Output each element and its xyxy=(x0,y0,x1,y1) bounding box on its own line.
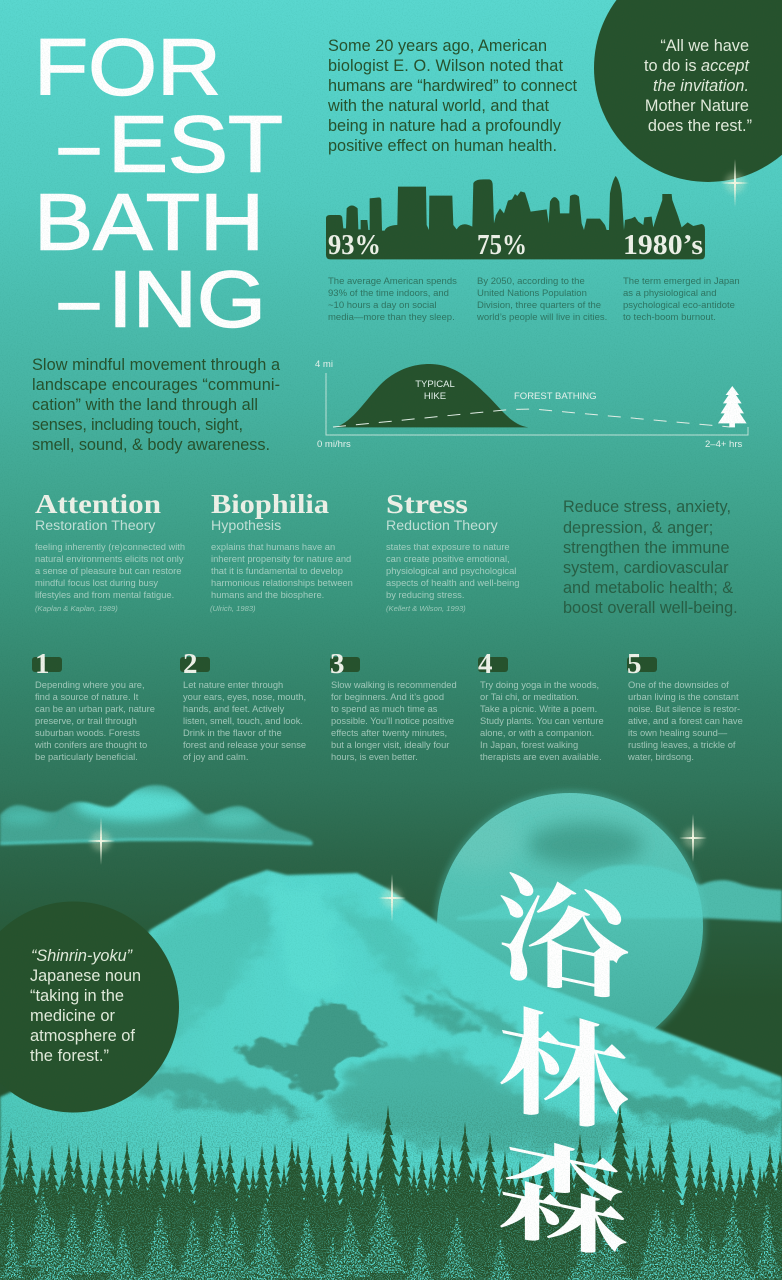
cloud: right xyxy=(457,865,782,922)
step 1: with conifers are thought to xyxy=(34,740,147,750)
description paragraph: smell, sound, & body awareness. xyxy=(32,436,270,454)
definition circle xyxy=(0,902,179,1112)
step 5 xyxy=(627,648,743,762)
forest bathing label: FOREST BATHING xyxy=(514,391,597,402)
definition text xyxy=(30,947,141,1065)
step 3: possible. You’ll notice positive xyxy=(331,716,454,726)
step 1: can be an urban park, nature xyxy=(35,704,155,714)
stat caption: 75%: Division, three quarters of the xyxy=(477,300,601,311)
stat caption: 75% xyxy=(476,276,607,323)
theory: attention restoration: feeling inherently (re)connected with xyxy=(35,542,185,552)
theory: stress reduction: (Kellert & Wilson, 1993) xyxy=(386,604,466,613)
moon xyxy=(434,790,706,1062)
y axis max label: 4 mi xyxy=(315,359,333,370)
axes xyxy=(326,373,748,435)
quote text xyxy=(644,37,752,135)
step 1: be particularly beneficial. xyxy=(35,752,138,762)
scene: moon, clouds, mountain, forest xyxy=(0,780,782,1280)
calligraphy: shinrin-yoku kanji: 林 xyxy=(497,996,629,1152)
title: Forest Bathing: BATH xyxy=(34,178,264,266)
step 4 number badge: 4 xyxy=(478,648,492,680)
theory: biophilia hypothesis: explains that humans have an xyxy=(211,542,335,552)
step 2: of joy and calm. xyxy=(183,752,248,762)
theory: stress reduction: by reducing stress. xyxy=(386,590,464,600)
step 2 number badge: 2 xyxy=(183,648,198,680)
step 1: find a source of nature. It xyxy=(35,692,139,702)
theory: stress reduction: can create positive emotional, xyxy=(386,554,510,564)
statistic: 93%: 93% xyxy=(328,230,381,261)
step 2: forest and release your sense xyxy=(183,740,306,750)
step 3: hours, is even better. xyxy=(331,752,418,762)
theory: stress reduction xyxy=(386,489,520,613)
theory: attention restoration xyxy=(35,489,185,613)
theory: biophilia hypothesis: humans and the biosphere. xyxy=(211,590,324,600)
description paragraph: landscape encourages “communi- xyxy=(32,376,280,394)
stat caption: 75%: United Nations Population xyxy=(477,288,587,299)
step 2: your ears, eyes, nose, mouth, xyxy=(183,692,306,702)
theory: stress reduction: Reduction Theory xyxy=(386,518,499,534)
benefits text: strengthen the immune xyxy=(563,539,730,557)
chart: typical hike vs forest bathing xyxy=(315,359,748,450)
title: Forest Bathing: – xyxy=(59,254,99,344)
quote text: the invitation. xyxy=(653,77,749,95)
step 2: hands, and feet. Actively xyxy=(183,704,285,714)
step 4: Study plants. You can venture xyxy=(480,716,604,726)
step 5 number badge: 5 xyxy=(627,648,642,680)
title: Forest Bathing: – xyxy=(59,100,99,188)
step 5: rustling leaves, a trickle of xyxy=(628,740,736,750)
statistic: 75%: 75% xyxy=(477,230,527,261)
stat caption: 1980's: The term emerged in Japan xyxy=(623,276,740,287)
calligraphy: shinrin-yoku kanji xyxy=(497,864,634,1276)
intro paragraph: biologist E. O. Wilson noted that xyxy=(328,57,563,75)
step 3: but a longer visit, ideally four xyxy=(331,740,449,750)
icon: sparkle on moon xyxy=(679,814,707,862)
title: Forest Bathing: EST xyxy=(108,100,283,188)
benefits text: Reduce stress, anxiety, xyxy=(563,498,731,516)
quote text: to do is accept xyxy=(644,57,750,75)
step 2: listen, smell, touch, and look. xyxy=(183,716,303,726)
description paragraph: cation” with the land through all xyxy=(32,396,258,414)
intro paragraph: with the natural world, and that xyxy=(327,97,549,115)
definition text: “taking in the xyxy=(30,987,124,1005)
title: Forest Bathing xyxy=(34,22,283,344)
stat caption: 93%: media—more than they sleep. xyxy=(328,312,455,323)
calligraphy: shinrin-yoku kanji: 森 xyxy=(497,1126,629,1276)
step 2: Let nature enter through xyxy=(183,680,283,690)
step 5: One of the downsides of xyxy=(628,680,729,690)
theory: stress reduction: aspects of health and well-being xyxy=(386,578,520,588)
description paragraph: Slow mindful movement through a xyxy=(32,356,281,374)
intro paragraph: being in nature had a profoundly xyxy=(328,117,562,135)
icon: sparkle by mountain xyxy=(378,874,406,922)
typical hike label: TYPICAL xyxy=(415,379,455,390)
stat caption: 93%: The average American spends xyxy=(328,276,457,287)
quote text: “All we have xyxy=(660,37,749,55)
definition text: “Shinrin-yoku” xyxy=(31,947,134,965)
stat caption: 1980's: as a physiological and xyxy=(623,288,716,299)
step 4: or Tai chi, or meditation. xyxy=(480,692,579,702)
step 4: therapists are even available. xyxy=(480,752,602,762)
theory: biophilia hypothesis: (Ulrich, 1983) xyxy=(210,604,256,613)
benefits text: system, cardiovascular xyxy=(563,559,729,577)
sunlit foreground trees xyxy=(0,1183,781,1280)
theory: attention restoration: Attention xyxy=(35,489,161,519)
forest bathing dashed line xyxy=(333,409,730,427)
title: Forest Bathing: ING xyxy=(108,254,266,344)
theory: attention restoration: a sense of pleasure but can restore xyxy=(35,566,181,576)
step 3: to spend as much time as xyxy=(331,704,438,714)
theory: biophilia hypothesis: that it is fundamental to develop xyxy=(211,566,343,576)
theory: biophilia hypothesis: Biophilia xyxy=(211,489,330,519)
statistic: 1980's: 1980’s xyxy=(623,230,703,261)
step 5: its own healing sound— xyxy=(628,728,728,738)
city skyline silhouette xyxy=(326,176,705,259)
step 5: ative, and a forest can have xyxy=(628,716,743,726)
intro paragraph: Some 20 years ago, American xyxy=(328,37,547,55)
hike curve xyxy=(335,364,528,427)
step 3: Slow walking is recommended xyxy=(331,680,457,690)
theory: stress reduction: states that exposure to nature xyxy=(386,542,510,552)
step 2 xyxy=(180,648,306,762)
x axis origin label: 0 mi/hrs xyxy=(317,439,351,450)
definition text: atmosphere of xyxy=(30,1027,135,1045)
theory: stress reduction: physiological and psychological xyxy=(386,566,516,576)
benefits text xyxy=(563,498,738,617)
benefits text: depression, & anger; xyxy=(563,519,713,537)
step 1: Depending where you are, xyxy=(35,680,145,690)
step 4: In Japan, forest walking xyxy=(480,740,578,750)
description paragraph xyxy=(32,356,281,454)
step 5: water, birdsong. xyxy=(627,752,694,762)
x axis end label: 2–4+ hrs xyxy=(705,439,742,450)
stat caption: 93%: 93% of the time indoors, and xyxy=(328,288,449,299)
quote text: does the rest.” xyxy=(648,117,752,135)
calligraphy: shinrin-yoku kanji: 浴 xyxy=(497,864,634,1021)
definition text: the forest.” xyxy=(30,1047,109,1065)
stat caption: 1980's xyxy=(623,276,740,323)
step 4: alone, or with a companion. xyxy=(480,728,594,738)
mountain xyxy=(0,868,782,1205)
step 3: effects after twenty minutes, xyxy=(331,728,447,738)
title: Forest Bathing: FOR xyxy=(34,22,221,112)
stat caption: 75%: world’s people will live in cities. xyxy=(476,312,607,323)
step 5: urban living is the constant xyxy=(628,692,739,702)
skyline with statistics xyxy=(326,176,705,261)
step 1: suburban woods. Forests xyxy=(35,728,140,738)
intro paragraph xyxy=(327,37,577,155)
definition text: medicine or xyxy=(30,1007,116,1025)
theory: stress reduction: Stress xyxy=(386,489,468,519)
theory: biophilia hypothesis xyxy=(210,489,353,613)
stat caption: 1980's: to tech-boom burnout. xyxy=(623,312,716,323)
forest xyxy=(0,1103,782,1280)
theory: attention restoration: lifestyles and from mental fatigue. xyxy=(35,590,174,600)
typical hike label line 2: HIKE xyxy=(424,391,446,402)
step 1: preserve, or trail through xyxy=(35,716,137,726)
stat caption: 93% xyxy=(328,276,457,323)
step 3: for beginners. And it’s good xyxy=(331,692,444,702)
step 3 xyxy=(330,648,457,762)
step 5: noise. But silence is restor- xyxy=(628,704,740,714)
theory: attention restoration: natural environments elicits not only xyxy=(35,554,184,564)
cloud: left xyxy=(0,784,314,847)
theory: attention restoration: mindful focus lost during busy xyxy=(35,578,158,588)
theory: biophilia hypothesis: Hypothesis xyxy=(211,518,281,534)
step 1 xyxy=(32,648,155,762)
description paragraph: senses, including touch, sight, xyxy=(32,416,243,434)
icon: tree xyxy=(718,386,747,427)
step 4 xyxy=(478,648,604,762)
intro paragraph: humans are “hardwired” to connect xyxy=(328,77,577,95)
theory: attention restoration: Restoration Theory xyxy=(35,518,156,534)
theory: biophilia hypothesis: inherent propensity for nature and xyxy=(211,554,351,564)
benefits text: and metabolic health; & xyxy=(563,579,733,597)
step 4: Take a picnic. Write a poem. xyxy=(480,704,597,714)
quote circle xyxy=(594,0,782,182)
quote text: Mother Nature xyxy=(645,97,749,115)
icon: sparkle near quote xyxy=(721,159,749,207)
intro paragraph: positive effect on human health. xyxy=(328,137,557,155)
step 3 number badge: 3 xyxy=(330,648,344,680)
definition text: Japanese noun xyxy=(30,967,141,985)
stat caption: 1980's: psychological eco-antidote xyxy=(623,300,735,311)
benefits text: boost overall well-being. xyxy=(563,599,738,617)
theory: biophilia hypothesis: harmonious relationships between xyxy=(211,578,353,588)
stat caption: 93%: ~10 hours a day on social xyxy=(328,300,437,311)
step 2: Drink in the flavor of the xyxy=(183,728,282,738)
theory: attention restoration: (Kaplan & Kaplan, 1989) xyxy=(35,604,118,613)
step 1 number badge: 1 xyxy=(35,648,50,680)
step 4: Try doing yoga in the woods, xyxy=(480,680,599,690)
stat caption: 75%: By 2050, according to the xyxy=(477,276,585,287)
icon: sparkle over left cloud xyxy=(87,817,115,865)
